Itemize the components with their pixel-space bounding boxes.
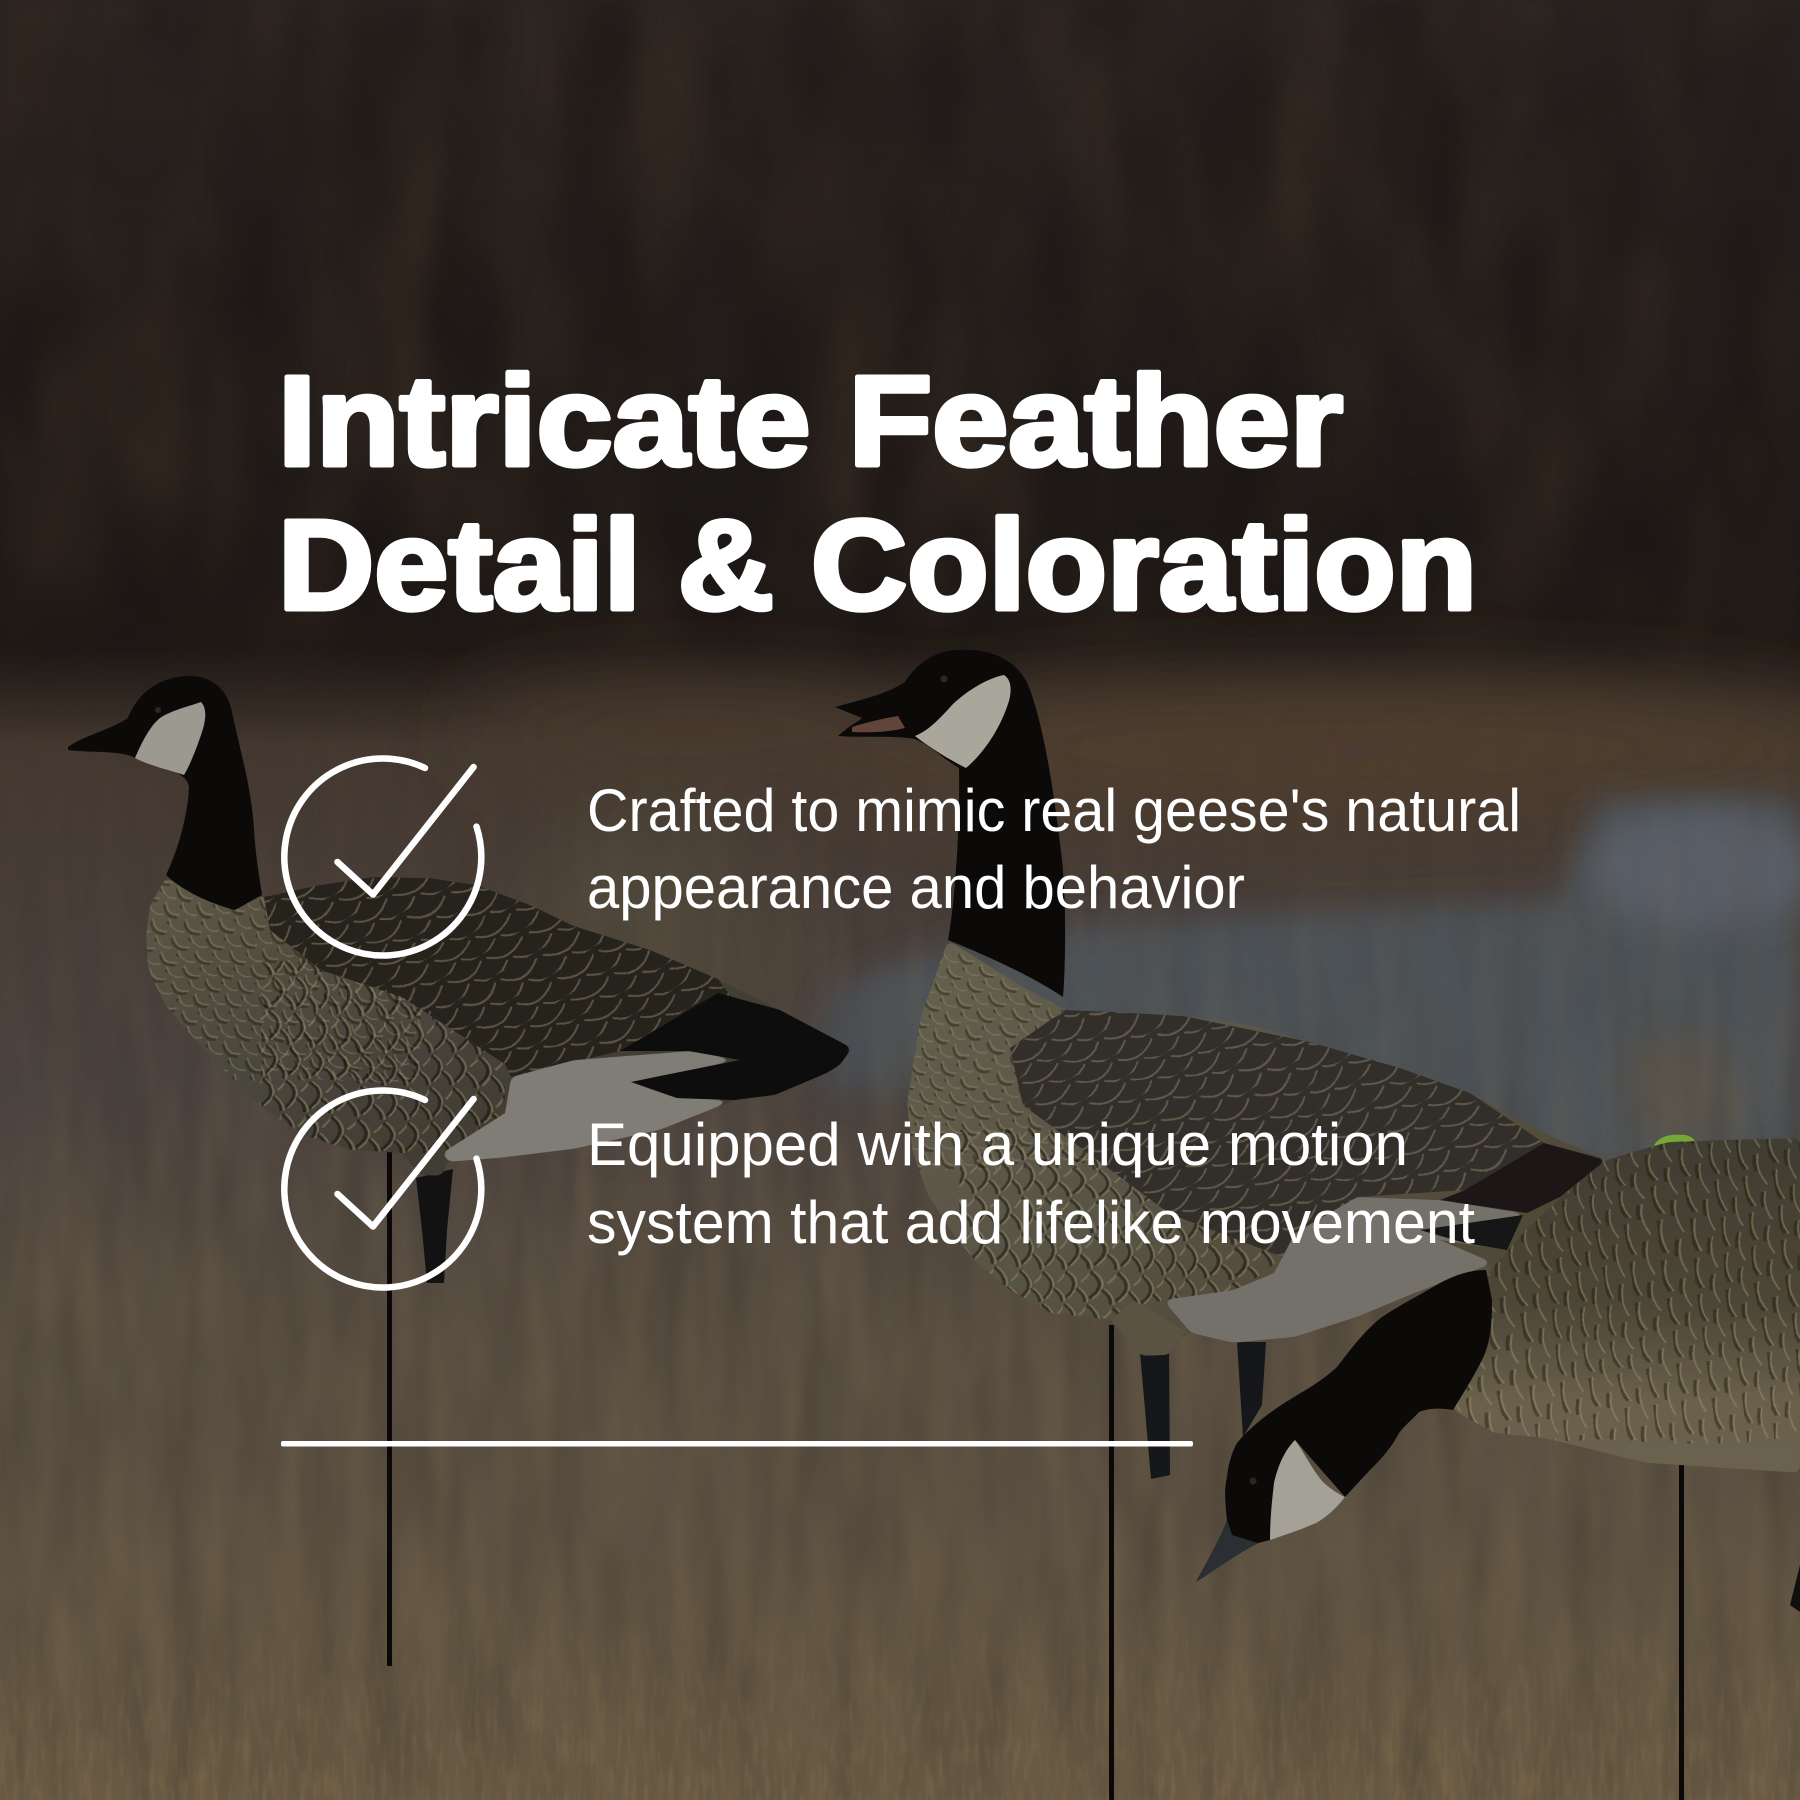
goose: centre standing decoy bbox=[835, 650, 1606, 1800]
beak: right goose bbox=[1196, 1520, 1258, 1582]
cheek: right goose bbox=[1270, 1440, 1345, 1540]
legs: centre goose bbox=[1140, 1342, 1266, 1479]
text: first benefit: appearance and behavior bbox=[587, 854, 1245, 921]
neck and head: right goose bbox=[1196, 1270, 1492, 1582]
text: first benefit: Crafted to mimic real geese's natural bbox=[587, 777, 1521, 844]
tag: right goose bbox=[1654, 1135, 1695, 1150]
title: Intricate Feather bbox=[278, 350, 1343, 493]
icon: check mark in circle, second item bbox=[284, 1091, 481, 1288]
open beak: centre goose bbox=[852, 716, 905, 732]
goose: left standing decoy bbox=[68, 676, 852, 1666]
text: second benefit: Equipped with a unique motion bbox=[587, 1111, 1408, 1178]
eye: left goose bbox=[155, 707, 161, 713]
leg: left goose bbox=[416, 1169, 453, 1283]
icon: check mark in circle, first item bbox=[284, 759, 481, 956]
body: left goose bbox=[146, 877, 850, 1176]
title bbox=[278, 350, 1477, 637]
stake: centre goose bbox=[1109, 1325, 1114, 1800]
text: second benefit: system that add lifelike movement bbox=[587, 1189, 1475, 1256]
title: Detail & Coloration bbox=[278, 494, 1477, 637]
cheek: left goose bbox=[135, 702, 205, 775]
goose: right feeding decoy bbox=[1196, 1120, 1800, 1800]
neck and head: centre goose bbox=[835, 650, 1065, 997]
cheek: centre goose bbox=[915, 675, 1011, 768]
eye: centre goose bbox=[940, 676, 948, 682]
neck and head: left goose bbox=[68, 676, 262, 910]
foot at the right edge bbox=[1790, 1565, 1800, 1612]
stake: right goose bbox=[1679, 1465, 1684, 1800]
divider line bbox=[281, 1441, 1193, 1446]
eye: right goose bbox=[1250, 1478, 1256, 1484]
body: centre goose bbox=[890, 940, 1606, 1356]
stake: left goose bbox=[387, 1150, 392, 1666]
body: right goose bbox=[1440, 1120, 1800, 1473]
